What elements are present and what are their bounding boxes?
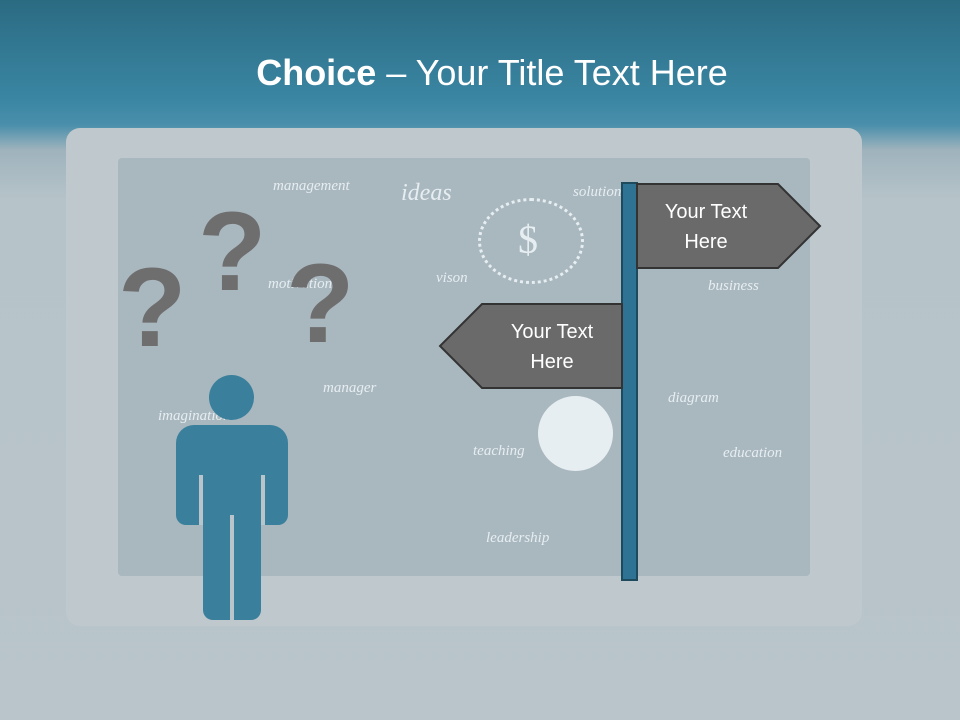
icon: person <box>176 375 288 620</box>
sign: left: Here <box>530 351 574 373</box>
tablet screen sketches: imagination <box>158 408 231 424</box>
tablet screen sketches: management <box>273 178 350 194</box>
sign: right: Your Text <box>665 201 748 223</box>
sign: left: Your Text <box>511 321 594 343</box>
question marks <box>118 189 354 370</box>
tablet screen sketches: solution <box>573 184 621 200</box>
tablet screen sketches <box>118 158 810 576</box>
question marks: ? <box>198 189 266 314</box>
title: Choice – Your Title Text Here <box>256 52 728 93</box>
tablet screen sketches: diagram <box>668 390 719 406</box>
pole <box>622 183 637 580</box>
sign: right <box>637 184 820 268</box>
tablet screen sketches: ideas <box>401 180 452 206</box>
sign: right: Here <box>684 231 728 253</box>
tablet screen sketches: leadership <box>486 530 549 546</box>
tablet screen sketches: vison <box>436 270 468 286</box>
tablet background <box>66 128 862 626</box>
tablet screen sketches: education <box>723 445 782 461</box>
tablet screen sketches: $ <box>518 217 538 262</box>
sign: left <box>440 304 622 388</box>
tablet screen sketches: motivation <box>268 276 332 292</box>
question marks: ? <box>118 245 186 370</box>
question marks: ? <box>286 241 354 366</box>
tablet screen sketches: teaching <box>473 443 525 459</box>
tablet screen sketches: manager <box>323 380 376 396</box>
tablet screen sketches: business <box>708 278 759 294</box>
